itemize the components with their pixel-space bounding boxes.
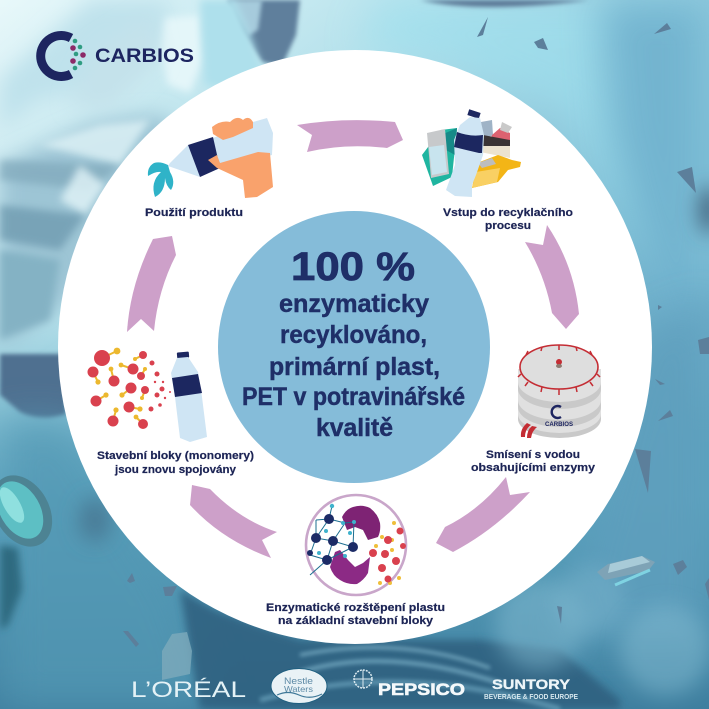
partner logo: Nestlé Waters: Nestle: [284, 676, 313, 686]
arrow: product use to recycling input: [297, 120, 403, 152]
label: monomers rejoined: jsou znovu spojovány: [114, 464, 237, 476]
icon: monomers forming new bottle: [88, 348, 207, 442]
partner logo: PepsiCo: [354, 670, 465, 699]
white ring panel: [58, 50, 652, 644]
label: product use: Použití produktu: [145, 207, 243, 219]
partner logo: PepsiCo: PEPSICO: [378, 680, 465, 699]
logo: Carbios: CARBIOS: [95, 46, 194, 67]
partner logo: Nestlé Waters: [271, 668, 327, 704]
label: monomers rejoined: Stavební bloky (monomery): [97, 450, 254, 462]
icon: pile of plastic waste: [422, 109, 521, 197]
partner logo: L'Oréal: L’ORÉAL: [131, 677, 246, 702]
arrow: rebuilding blocks to product use: [127, 236, 176, 332]
icon: enzyme splitting plastic: [306, 495, 406, 595]
central headline: PET v potravinářské: [242, 383, 465, 411]
arrow: mixing to enzymatic splitting: [436, 477, 530, 552]
central headline: [242, 245, 465, 442]
floating plastic shards: [123, 17, 709, 647]
partner logo: Suntory: SUNTORY: [492, 676, 571, 692]
central circle: [218, 211, 490, 483]
label: recycling input: procesu: [485, 220, 531, 232]
central headline: primární plast,: [269, 353, 440, 381]
arrow: splitting to rebuilding blocks: [190, 485, 277, 558]
glass ring fragment: [0, 465, 64, 557]
arrow: recycling input to mixing: [525, 225, 579, 329]
central headline: kvalitě: [316, 414, 393, 442]
label: mixing with enzyme water: [471, 449, 596, 474]
partner logo: Suntory: BEVERAGE & FOOD EUROPE: [484, 694, 578, 701]
label: enzymatic splitting: Enzymatické rozštěpení plastu: [266, 602, 445, 614]
label: monomers rejoined: [97, 450, 254, 476]
label: enzymatic splitting: na základní stavební bloky: [278, 615, 434, 627]
glass shard with ring: [162, 556, 655, 680]
partner logo: Nestlé Waters: Waters: [284, 684, 313, 694]
central headline: enzymaticky: [279, 290, 429, 318]
icon: Carbios reactor tank: [518, 345, 601, 438]
label: recycling input: [443, 207, 573, 232]
label: mixing with enzyme water: Smísení s vodou: [486, 449, 580, 461]
central headline: 100 %: [291, 245, 415, 289]
icon: hand pouring bottle: [148, 118, 273, 198]
partner logo: Suntory: [484, 676, 578, 701]
icon: Carbios reactor tank: CARBIOS: [545, 422, 573, 428]
label: mixing with enzyme water: obsahujícími enzymy: [471, 462, 596, 474]
logo: Carbios: [41, 35, 194, 76]
label: enzymatic splitting: [266, 602, 445, 627]
label: recycling input: Vstup do recyklačního: [443, 207, 573, 219]
central headline: recyklováno,: [280, 321, 427, 349]
